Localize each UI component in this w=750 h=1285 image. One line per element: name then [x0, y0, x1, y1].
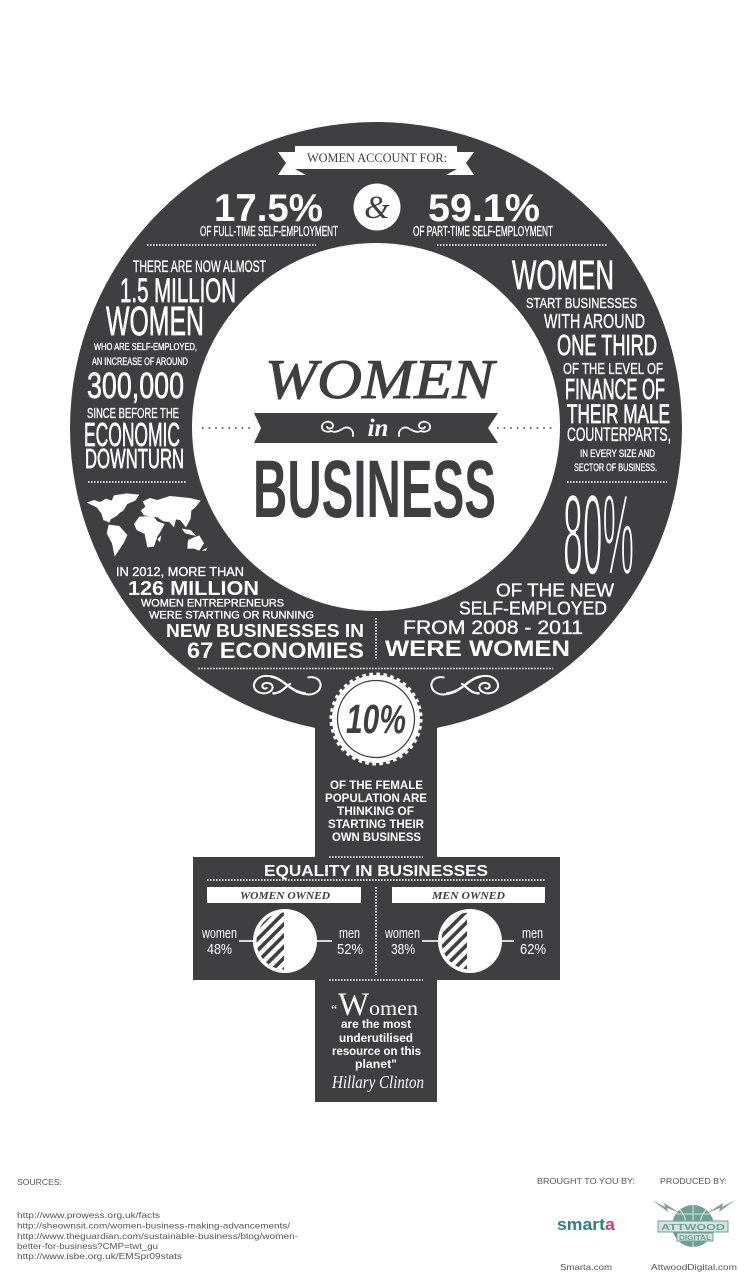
quote: hillary clinton: omen	[369, 996, 419, 1020]
panel: men owned: men	[522, 925, 543, 942]
text block: 126 million: WOMEN ENTREPRENEURS	[141, 598, 284, 610]
credit: smarta: a	[605, 1215, 616, 1234]
panel: men owned: MEN OWNED	[431, 890, 505, 902]
stat: 59.1% part-time	[413, 187, 553, 240]
logo: attwood globe: ATTWOOD	[661, 1222, 725, 1232]
credit: smarta: smart	[557, 1215, 605, 1234]
flourish left	[254, 676, 321, 694]
sources: SOURCES:	[17, 1177, 62, 1187]
stat: 80% of new self-employed	[385, 472, 634, 661]
text block: 1.5 million women: WHO ARE SELF-EMPLOYED,	[94, 341, 197, 353]
text block: women start businesses: COUNTERPARTS,	[567, 425, 671, 446]
quote: hillary clinton: are the most	[341, 1019, 411, 1031]
sources	[17, 1177, 298, 1261]
text block: female population: OWN BUSINESS	[332, 832, 421, 844]
text block: 126 million: NEW BUSINESSES IN	[166, 620, 364, 641]
text block: women start businesses	[512, 252, 671, 474]
panel: men owned	[384, 887, 546, 973]
icon: world map	[87, 493, 208, 557]
quote: hillary clinton: Hillary Clinton	[331, 1072, 424, 1092]
text block: 1.5 million women: THERE ARE NOW ALMOST	[133, 257, 266, 276]
quote: hillary clinton: underutilised	[339, 1033, 413, 1045]
text block: women start businesses: IN EVERY SIZE AND	[580, 448, 655, 460]
text block: women start businesses: WOMEN	[512, 252, 614, 298]
text block: 1.5 million women: WOMEN	[106, 298, 204, 344]
quote: hillary clinton: W	[338, 987, 370, 1023]
ribbon: women account for	[278, 146, 474, 175]
stat: 59.1% part-time: 59.1%	[428, 187, 540, 230]
text block: 1.5 million women: 1.5 MILLION	[120, 272, 236, 310]
quote: hillary clinton: planet"	[355, 1059, 397, 1071]
pie chart: women owned	[253, 909, 317, 973]
stat: 80% of new self-employed: WERE WOMEN	[385, 636, 570, 661]
title banner	[254, 413, 498, 443]
badge: 10%	[331, 674, 421, 764]
text block: 1.5 million women: ECONOMIC	[84, 416, 180, 453]
sources: http://www.theguardian.com/sustainable-business/blog/women-	[17, 1231, 298, 1241]
sources: better-for-business?CMP=twt_gu	[17, 1241, 158, 1251]
stat: 80% of new self-employed: SELF-EMPLOYED	[459, 598, 607, 618]
panel: men owned: women	[384, 925, 420, 942]
text block: women start businesses: ONE THIRD	[557, 330, 657, 362]
badge: 10%: 10%	[346, 696, 406, 742]
ampersand badge	[354, 184, 400, 230]
text block: female population	[325, 780, 427, 844]
pie chart: men owned	[438, 909, 502, 973]
heading: equality in businesses: EQUALITY IN BUSINESSES	[264, 863, 488, 880]
quote: hillary clinton	[331, 987, 424, 1092]
text block: women start businesses: SECTOR OF BUSINESS.	[574, 462, 657, 474]
panel: men owned: 62%	[520, 941, 546, 958]
text block: female population: THINKING OF	[337, 806, 414, 818]
text block: female population: STARTING THEIR	[328, 819, 425, 831]
panel: women owned	[201, 887, 363, 973]
logo: attwood globe: DIGITAL	[679, 1235, 712, 1242]
text block: women start businesses: WITH AROUND	[544, 311, 645, 333]
credit: attwood digital	[651, 1176, 737, 1272]
text block: women start businesses: OF THE LEVEL OF	[563, 361, 663, 378]
text block: female population: OF THE FEMALE	[330, 780, 423, 792]
text block: 126 million: 126 MILLION	[128, 578, 259, 600]
quote: hillary clinton: resource on this	[332, 1046, 421, 1058]
panel: men owned: 38%	[391, 941, 415, 958]
credit: attwood digital: AttwoodDigital.com	[651, 1262, 737, 1272]
text block: 126 million	[116, 564, 364, 663]
text block: 126 million: 67 ECONOMIES	[187, 638, 364, 663]
panel: women owned: men	[339, 925, 360, 942]
flourish right	[431, 676, 498, 694]
credit: smarta	[537, 1176, 635, 1272]
title banner: in	[368, 415, 388, 442]
panel: women owned: 52%	[337, 941, 363, 958]
ribbon: women account for: WOMEN ACCOUNT FOR:	[307, 151, 447, 165]
sources: http://www.isbe.org.uk/EMSpr09stats	[17, 1251, 182, 1261]
text block: female population: POPULATION ARE	[325, 793, 427, 805]
credit: smarta: Smarta.com	[560, 1262, 612, 1272]
logo: attwood globe	[652, 1200, 735, 1247]
text block: 1.5 million women: SINCE BEFORE THE	[87, 405, 179, 422]
text block: 126 million: WERE STARTING OR RUNNING	[149, 610, 314, 622]
text block: women start businesses: START BUSINESSES	[526, 295, 637, 312]
text block: 1.5 million women: AN INCREASE OF AROUND	[92, 356, 188, 368]
panel: women owned: WOMEN OWNED	[240, 890, 330, 902]
sources: http://sheownsit.com/women-business-making-advancements/	[17, 1220, 291, 1230]
stat: 80% of new self-employed: FROM 2008 - 2011	[403, 618, 583, 639]
text block: 1.5 million women	[84, 257, 266, 474]
text block: 1.5 million women: DOWNTURN	[85, 443, 184, 474]
ampersand badge: &	[364, 190, 390, 226]
text block: 1.5 million women: 300,000	[87, 365, 184, 406]
credit: attwood digital: PRODUCED BY:	[660, 1176, 727, 1186]
text block: women start businesses: THEIR MALE	[567, 399, 670, 429]
title: women in business: WOMEN	[265, 349, 497, 411]
text block: women start businesses: FINANCE OF	[565, 374, 665, 406]
panel: women owned: women	[201, 925, 237, 942]
title: women in business	[253, 349, 498, 535]
panel: women owned: 48%	[207, 941, 232, 958]
sources: http://www.prowess.org.uk/facts	[17, 1210, 160, 1220]
stat: 80% of new self-employed: OF THE NEW	[496, 580, 615, 600]
venus symbol background	[70, 122, 682, 1102]
stat: 17.5% full-time	[200, 187, 338, 240]
stat: 59.1% part-time: OF PART-TIME SELF-EMPLOYMENT	[413, 223, 553, 240]
credit: smarta: BROUGHT TO YOU BY:	[537, 1176, 635, 1186]
stat: 17.5% full-time: OF FULL-TIME SELF-EMPLOYMENT	[200, 223, 338, 240]
title: women in business: BUSINESS	[253, 444, 496, 535]
stat: 17.5% full-time: 17.5%	[214, 187, 323, 230]
quote: hillary clinton: “	[331, 1003, 337, 1018]
text block: 126 million: IN 2012, MORE THAN	[116, 564, 244, 579]
